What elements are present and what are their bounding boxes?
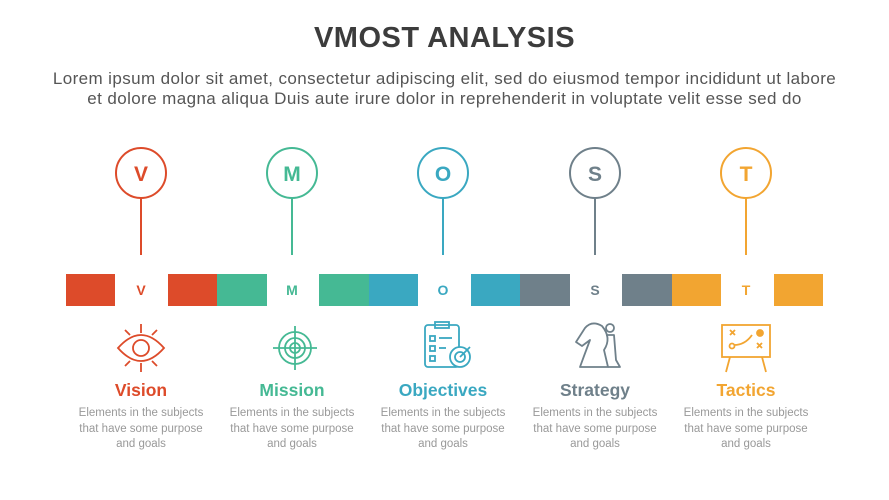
pin V — [116, 148, 166, 255]
icon: board — [722, 325, 770, 372]
icon: target — [273, 326, 317, 370]
item: Objectives: Objectives — [399, 380, 487, 400]
item: Strategy — [533, 380, 657, 450]
item: Strategy: Strategy — [560, 380, 630, 400]
pin M: M — [283, 163, 301, 186]
icon: chess — [576, 323, 620, 367]
item: Mission: and goals — [267, 438, 317, 450]
item: Strategy: Elements in the subjects — [533, 407, 657, 419]
item: Tactics: Tactics — [716, 380, 776, 400]
item: Mission: that have some purpose — [230, 422, 354, 434]
pin O: O — [435, 163, 451, 186]
item: Tactics: that have some purpose — [684, 422, 808, 434]
item: Vision: and goals — [116, 438, 166, 450]
bar: S — [590, 282, 600, 298]
item: Tactics: and goals — [721, 438, 771, 450]
pin M — [267, 148, 317, 255]
item: Mission — [230, 380, 354, 450]
subtitle: Lorem ipsum dolor sit amet, consectetur adipiscing elit, sed do eiusmod tempor incididunt ut labore — [53, 69, 836, 88]
subtitle: et dolore magna aliqua Duis aute irure dolor in reprehenderit in voluptate velit esse sed do — [87, 89, 802, 108]
item: Objectives: Elements in the subjects — [381, 407, 505, 419]
pin V: V — [134, 163, 148, 186]
subtitle — [53, 69, 836, 108]
pin S — [570, 148, 620, 255]
bar — [66, 274, 823, 306]
item: Tactics — [684, 380, 808, 450]
item: Tactics: Elements in the subjects — [684, 407, 808, 419]
pin O — [418, 148, 468, 255]
item: Mission: Elements in the subjects — [230, 407, 354, 419]
item: Vision: Elements in the subjects — [79, 407, 203, 419]
pin S: S — [588, 163, 602, 186]
item: Objectives: and goals — [418, 438, 468, 450]
pin T — [721, 148, 771, 255]
title: VMOST ANALYSIS — [314, 22, 575, 54]
bar: V — [136, 282, 146, 298]
bar: O — [438, 282, 449, 298]
icon: clipboard — [425, 322, 470, 367]
bar: M — [286, 282, 298, 298]
item: Strategy: that have some purpose — [533, 422, 657, 434]
item: Objectives: that have some purpose — [381, 422, 505, 434]
item: Mission: Mission — [259, 380, 325, 400]
item: Vision: Vision — [115, 380, 167, 400]
item: Objectives — [381, 380, 505, 450]
item: Vision — [79, 380, 203, 450]
pin T: T — [740, 163, 753, 186]
item: Strategy: and goals — [570, 438, 620, 450]
item: Vision: that have some purpose — [79, 422, 203, 434]
bar: T — [742, 282, 751, 298]
icon: eye — [118, 324, 164, 372]
